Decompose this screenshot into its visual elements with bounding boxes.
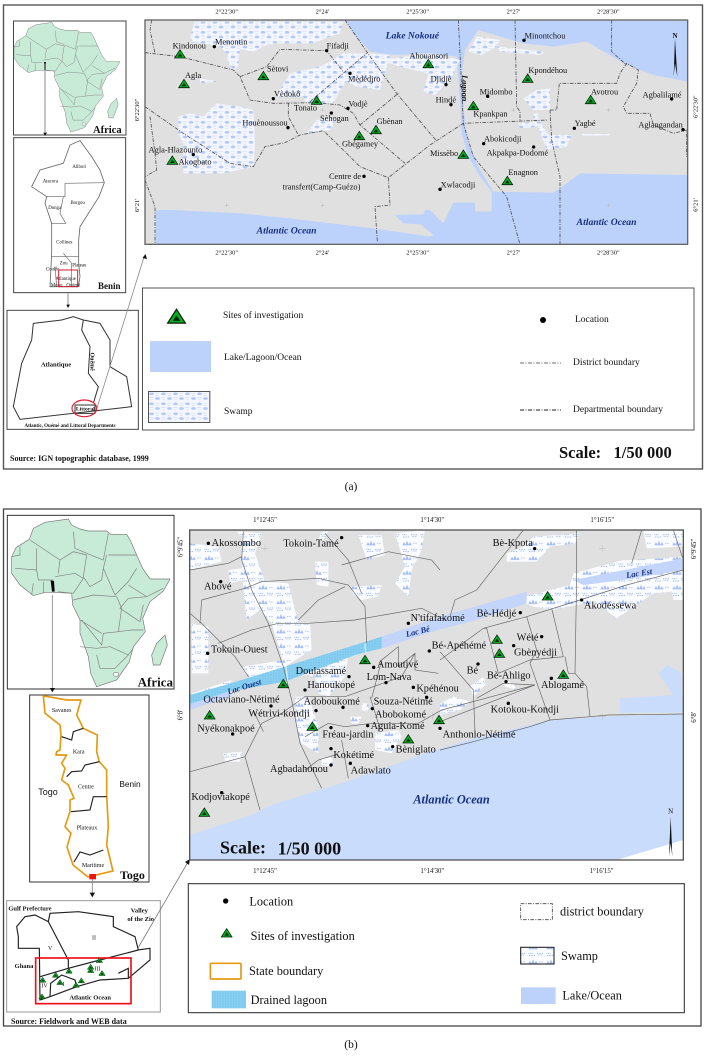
inset: Benin departments: Donga [48,206,62,211]
legend item: lake/ocean [521,987,622,1004]
coordinate labels b: 1°16'15" [590,868,614,875]
place labels b: Aguia-Komé [371,721,425,732]
coordinate labels b: 1°12'45" [253,517,277,524]
legend item: lake/lagoon/ocean: Lake/Lagoon/Ocean [224,353,302,363]
legend item: swamp: Swamp [224,407,253,417]
inset: Togo regions: Savanes [52,708,72,714]
land east of lagoon [462,30,688,193]
grid crosses [225,108,610,207]
place labels a: Akpakpa-Dodomé [487,149,548,158]
place labels a: Vèdokô [274,89,300,98]
place labels b: Adoboukomé [304,697,360,708]
place labels a: Agla [185,71,201,80]
place labels a: Yagbé [575,119,596,128]
legend item: district boundary: District boundary [573,358,640,368]
place labels b: Fréau-jardin [322,730,373,741]
place labels b: Wété [517,633,539,644]
coordinate labels a [134,8,699,256]
place labels b: Tokoin-Ouest [211,645,268,656]
legend item: location [223,895,293,909]
place labels a: Vodjè [348,99,368,108]
inset: Atlantique, Ouémé and Littoral departments: Ouémé [89,353,95,371]
place labels b: Hanoukopé [307,680,355,691]
place labels b: Kodjoviakopé [191,792,250,803]
coordinate labels b: 1°16'15" [590,517,614,524]
place labels a: Midombo [480,87,513,96]
inset: Togo regions: Togo [120,868,145,882]
place labels b: Bè-Ahligo [487,671,531,682]
place labels a: Kpondéhou [528,66,568,75]
place labels a: Akogbato [179,158,212,167]
coordinate labels a: 2°27' [507,249,520,256]
inset: Gulf Prefecture [7,901,160,1012]
coordinate labels b: 6°9'45" [691,539,698,559]
arrow: Littoral to main map [97,254,147,408]
inset: Togo regions: Kara [73,750,85,756]
place labels b: Gbènyédji [514,647,557,658]
legend item: location: Location [249,895,293,909]
place labels b: Bé [467,666,479,677]
inset: Africa locating Togo [7,515,174,690]
inset: Togo regions: Togo [38,787,58,797]
place labels b: Bé-Apéhémé [432,641,487,652]
place labels b: Anthonio-Nétimé [443,730,516,741]
place labels a: Aglangandan [638,120,684,129]
place labels b: Ablogamé [541,680,584,691]
legend item: sites of investigation: Sites of investigation [223,310,303,321]
place labels a: Missèbo [430,149,458,158]
legend item: sites of investigation: Sites of investigation [251,929,355,943]
panel b: Togo study area [4,509,701,1026]
coordinate labels b [177,517,698,875]
coordinate labels a: 2°28'30" [597,8,620,15]
place labels b [191,538,637,803]
coordinate labels a: 6°22'30" [134,98,141,121]
place labels a: Agbalilamé [643,90,682,99]
legend item: swamp: Swamp [561,949,598,963]
place labels a: Djidjè [431,74,452,83]
locations a [192,39,685,191]
coordinate labels b: 1°12'45" [253,868,277,875]
map a: Cotonou lake and ocean [134,8,699,256]
district boundaries a [145,20,687,244]
water labels a [256,31,636,236]
inset: Gulf Prefecture: V [48,946,53,952]
water labels b [225,567,653,807]
land west of lagoon [145,20,492,244]
coordinate labels a: 6°21' [692,198,699,212]
place labels b: Kotokou-Kondji [491,704,559,715]
place labels b: Kpéhénou [416,683,459,694]
panel a: Benin study area [4,5,702,469]
place labels a: Xwlacodji [441,181,476,190]
place labels a: Abokicodji [484,134,522,143]
inset: Benin departments: Couffo [46,268,60,273]
place labels b: Tokoin-Tamé [283,539,339,550]
legend item: swamp [148,392,253,422]
inset: Gulf Prefecture: Gulf Prefecture [8,906,52,913]
place labels a: Ahouansori [409,52,449,61]
coordinate labels a: 2°22'30" [215,8,238,15]
place labels a: transfert(Camp-Guézo) [283,182,361,191]
place labels a: Kpankpan [473,109,508,118]
place labels b: Amoutivé [377,659,419,670]
place labels b: Abobokomé [375,710,426,721]
arrow: prefecture to main map [138,859,190,948]
place labels a: Gbégamey [342,139,379,148]
coordinate labels b: 1°14'30" [420,868,444,875]
coordinate labels a: 6°22'30" [692,95,699,118]
coordinate labels a: 6°21' [134,199,141,212]
legend item: lake/ocean: Lake/Ocean [562,988,622,1002]
coordinate labels b: 6°8' [691,712,698,723]
source note a: Source: IGN topographic database, 1999 [10,454,149,463]
inset: Atlantique, Ouémé and Littoral departments: Atlantique [41,361,71,368]
inset: Togo regions: Centre [78,785,94,791]
place labels a: Sètovi [267,64,289,73]
place labels a: Agla-Hlazounto [149,145,202,154]
water labels a: Atlantic Ocean [576,217,636,228]
place labels b: Octaviano-Nétimé [203,695,280,706]
coordinate labels b: 6°9'45" [177,537,184,557]
legend item: district boundary: district boundary [560,904,645,918]
inset: Gulf Prefecture: Valley [131,908,149,915]
place labels b: Bè-Hédjé [477,609,517,620]
arrow: Togo to prefecture [90,879,95,897]
map b: Lomé [177,517,698,875]
coordinate labels a: 2°22'30" [215,249,238,256]
place labels b: Akodéssewa [584,601,637,612]
north arrow b: N [668,807,673,815]
roads and district boundaries b [190,530,683,810]
drained lagoon [190,637,382,704]
water labels b: Lac Est [625,567,653,580]
place labels b: Doulassamé [296,666,347,677]
place labels a: Gbènan [377,117,403,126]
coordinate labels b: 6°8' [177,710,184,720]
water labels a: Lake Nokoué [385,31,440,42]
legend item: drained lagoon [212,991,327,1008]
place labels a: Hindé [436,95,456,104]
inset: Atlantique, Ouémé and Littoral departments [7,310,138,429]
inset: Benin departments: Atlantique [55,277,76,282]
place labels a: Fifadji [327,41,350,50]
legend b [188,884,684,1013]
inset: Benin departments: Plateau [72,263,87,268]
inset: Benin departments [14,138,126,293]
arrow: Africa to Benin [43,63,47,136]
inset: Benin departments: Collines [56,241,72,246]
arrow: Africa to Togo [50,595,55,692]
legend item: lake/lagoon/ocean [150,341,302,372]
lagoon: lakes [190,558,683,710]
inset: Benin departments: Zou [60,261,68,266]
place labels a: Sèhogan [320,114,350,123]
inset: Atlantique, Ouémé and Littoral departments: Atlantic, Ouémé and Littoral Departments [25,424,116,429]
place labels b: Akossombo [212,538,261,549]
place labels b: N'tifafakomé [411,613,465,624]
inset: Togo regions: Maritime [82,863,104,869]
legend item: drained lagoon: Drained lagoon [251,993,327,1007]
ocean b [190,714,683,860]
place labels a: Menontin [215,37,248,46]
place labels b: Souza-Nétimé [374,696,433,707]
inset: Gulf Prefecture: II [92,935,96,941]
water labels a: Atlantic Ocean [256,225,316,236]
inset: Gulf Prefecture: Ghana [15,963,34,970]
inset: Africa locating Togo: Africa [138,675,173,690]
inset: Gulf Prefecture: IV [41,983,48,989]
inset: Benin departments: Borgou [70,201,85,206]
place labels b: Bè-Kpota [493,538,533,549]
place labels a: Tonato [294,104,317,113]
inset: Togo regions [30,695,149,882]
legend item: district boundary [521,904,645,920]
legend item: departmental boundary: Departmental boundary [573,405,663,415]
locations b [206,536,583,794]
place labels a: Kindonou [173,42,207,51]
place labels a: Enagnon [508,168,539,177]
legend item: location: Location [575,315,609,325]
legend item: location [540,315,609,325]
scale a: Scale: 1/50 000 [559,443,672,462]
place labels a: Mèdédjro [348,75,380,84]
inset: Gulf Prefecture: of the Zio [127,916,154,923]
place labels b: Kokétimé [333,750,374,761]
place labels b: Wétrivi-kondji [248,709,310,720]
legend item: state boundary [210,963,324,979]
inset: Benin departments: Ouémé [66,284,80,289]
north arrow a [672,32,678,77]
caption a: (a) [345,481,358,493]
legend item: swamp [521,947,598,964]
place labels a: Minontchou [525,31,566,40]
arrow: Benin to departments [66,293,70,308]
legend item: district boundary [520,358,640,368]
coordinate labels a: 2°28'30" [597,249,620,256]
inset: Africa locating Benin: Africa [93,125,122,136]
swamps b [190,530,683,767]
coordinate labels a: 2°25'30" [406,249,429,256]
inset: Benin departments: Alibori [72,165,87,170]
caption b: (b) [344,1039,358,1051]
place labels b: Bèniglato [396,745,436,756]
place labels b: Abové [204,581,232,592]
coordinate labels a: 2°24' [316,249,329,256]
grid crosses b [262,545,606,720]
map b: Lomé: 1/50 000 [278,839,341,859]
inset: Africa locating Benin [14,21,126,136]
inset: Benin departments: Benin [98,281,120,291]
scale b: Scale: [220,837,266,857]
source note b: Source: Fieldwork and WEB data [11,1017,127,1026]
place labels b: Agbadahonou [270,764,328,775]
place labels b: Nyékonakpoé [197,723,255,734]
coordinate labels b: 1°14'30" [420,517,444,524]
inset: Gulf Prefecture: I [63,982,65,988]
inset: Togo regions: Benin [119,779,141,789]
legend a [142,288,694,430]
legend item: sites of investigation [168,309,303,323]
water labels b: Lac Ouest [225,677,263,697]
legend item: state boundary: State boundary [249,964,324,978]
sites on prefecture inset [39,958,105,999]
north arrow b [668,807,673,857]
place labels b: Lom-Nava [367,672,412,683]
coordinate labels a: 2°27' [507,8,520,15]
sites of investigation b [199,592,569,816]
place labels a [149,31,684,191]
water labels a: Lagoon [460,74,469,102]
coordinate labels a: 2°24' [316,8,329,15]
inset: Atlantique, Ouémé and Littoral departments: Littoral [76,406,95,412]
coordinate labels a: 2°25'30" [406,8,429,15]
place labels a: Centre de [329,172,361,181]
sites of investigation a [167,50,596,185]
inset: Gulf Prefecture: III [95,967,101,973]
inset: Benin departments: Atacora [43,180,59,185]
inset: Gulf Prefecture: Atlantic Ocean [69,995,111,1002]
inset: Togo regions: Plateaux [77,826,97,832]
swamps a [178,22,610,173]
harbour b [620,665,683,713]
inset: Benin departments: Mono [51,284,63,289]
place labels b: Adawlato [351,765,391,776]
north arrow a: N [672,32,678,40]
place labels a: Avotrou [591,88,619,97]
place labels a: Houènoussou [242,118,289,127]
water labels b: Lac Bé [404,624,431,639]
water labels b: Atlantic Ocean [412,793,490,807]
